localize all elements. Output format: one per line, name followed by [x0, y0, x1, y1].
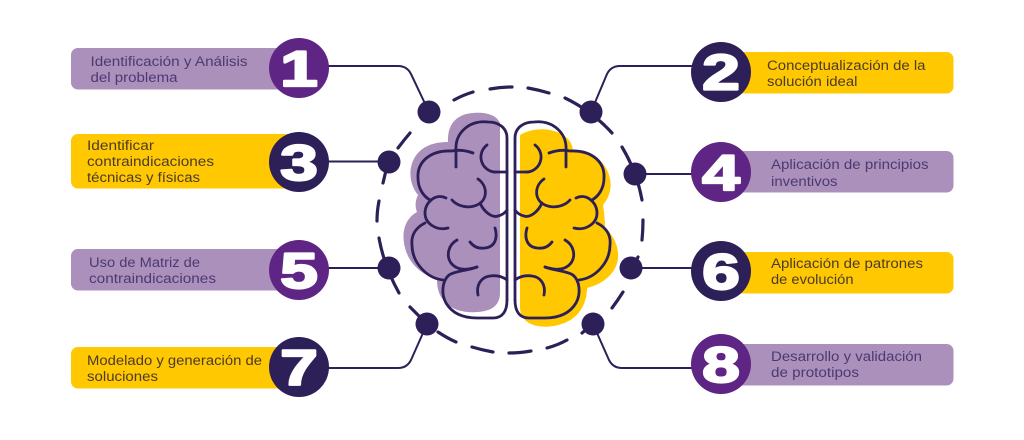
step 1: Identificación y Análisis	[90, 54, 248, 69]
step 4: 4	[702, 145, 740, 201]
step 5: Uso de Matriz de	[89, 255, 200, 270]
step 4: inventivos	[771, 174, 838, 189]
step 8: Desarrollo y validación	[771, 349, 922, 364]
step 6: 6	[702, 244, 740, 300]
connector nodes	[378, 100, 646, 336]
step 5: 5	[280, 243, 318, 299]
step 6	[691, 241, 954, 301]
right hemisphere fill	[520, 129, 618, 327]
step 3: 3	[280, 135, 318, 191]
step 6: Aplicación de patrones	[771, 256, 923, 271]
step 8	[691, 334, 954, 394]
step 8: de prototipos	[771, 365, 859, 380]
step 2	[691, 42, 954, 102]
dashed ring around brain	[377, 87, 643, 353]
step 6: de evolución	[771, 272, 854, 287]
step 3: técnicas y físicas	[87, 170, 200, 185]
step 1: del problema	[90, 70, 178, 85]
step 4: Aplicación de principios	[771, 157, 929, 172]
step 2: 2	[702, 44, 740, 100]
step 7: soluciones	[87, 369, 158, 384]
right hemisphere outline	[515, 122, 610, 318]
step 4	[691, 142, 954, 202]
step 7	[71, 337, 329, 397]
step 1	[71, 38, 329, 98]
connector lines	[328, 66, 692, 368]
step 3: Identificar	[87, 138, 155, 153]
step 2: Conceptualización de la	[767, 58, 926, 73]
left hemisphere fill	[404, 113, 500, 312]
brain illustration	[404, 113, 618, 327]
step 3	[71, 132, 329, 192]
step 8: 8	[702, 337, 740, 393]
step 5: contraindicaciones	[89, 271, 216, 286]
step 7: Modelado y generación de	[87, 353, 262, 368]
left hemisphere outline	[412, 122, 507, 318]
step 2: solución ideal	[767, 74, 858, 89]
step 1: 1	[280, 41, 318, 97]
step 3: contraindicaciones	[87, 154, 214, 169]
step 5	[71, 240, 329, 300]
step 7: 7	[280, 340, 318, 396]
